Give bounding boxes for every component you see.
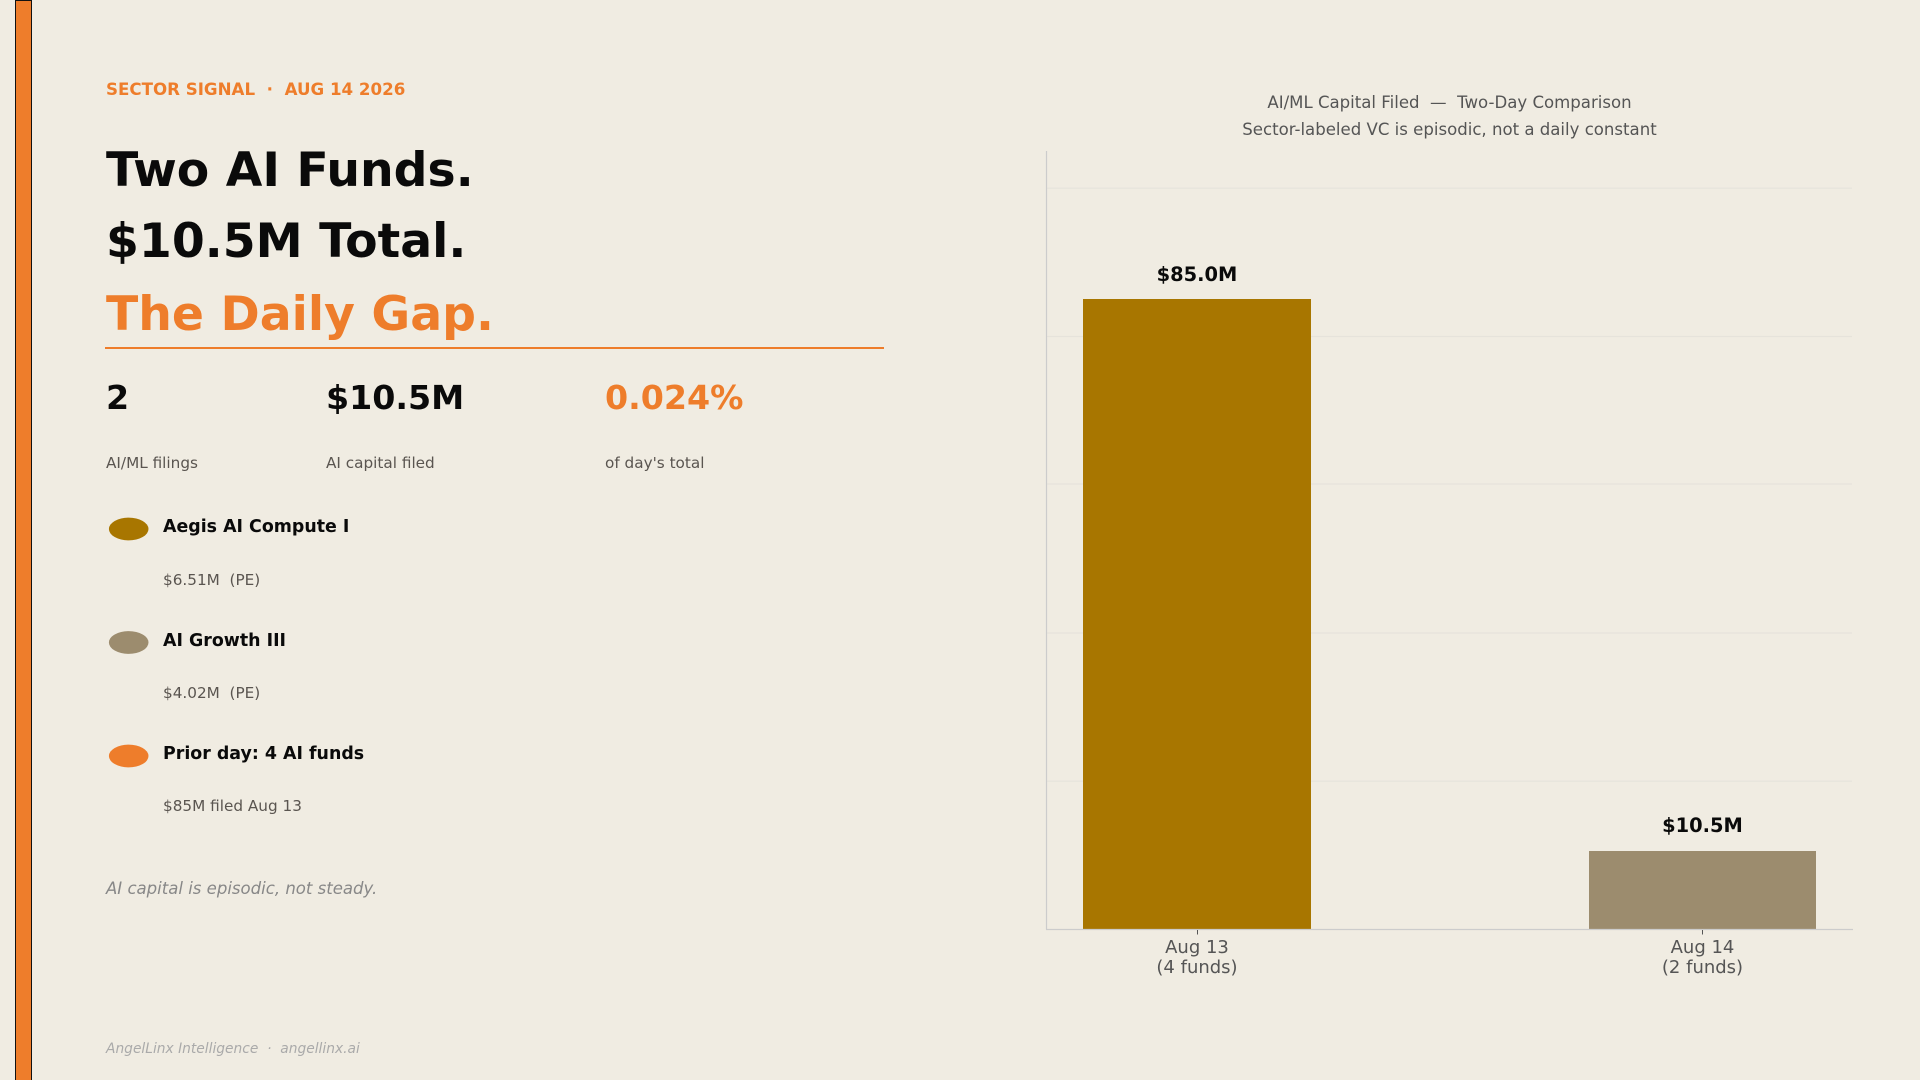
- title: The Daily Gap.: [106, 287, 494, 342]
- axis label: Aug 14: [1662, 937, 1743, 978]
- axis label: Aug 14: Aug 14: [1671, 937, 1734, 958]
- stat: filings: 2: [106, 378, 129, 417]
- stat: capital: AI capital filed: [326, 454, 435, 472]
- legend item: AI Growth III: AI Growth III: [163, 631, 286, 651]
- value label: Aug 13: $85.0M: [1157, 263, 1237, 286]
- footer source: AngelLinx Intelligence · angellinx.ai: [105, 1041, 360, 1057]
- stat: capital: [326, 378, 464, 472]
- title rule: [105, 347, 884, 349]
- legend item: prior day: [109, 744, 364, 815]
- accent bar: [16, 0, 32, 1080]
- legend item: AI Growth III: $4.02M (PE): [163, 684, 260, 702]
- legend item: AI Growth III: [109, 631, 286, 702]
- axis label: Aug 13: Aug 13: [1165, 937, 1229, 958]
- panel: left summary: [105, 80, 884, 1057]
- axis label: Aug 14: (2 funds): [1662, 957, 1743, 978]
- takeaway note: AI capital is episodic, not steady.: [105, 879, 377, 898]
- bar: Aug 13: [1083, 299, 1311, 929]
- stat: filings: AI/ML filings: [106, 454, 198, 472]
- bar: Aug 14: [1589, 851, 1816, 929]
- stat: share: 0.024%: [605, 378, 744, 417]
- stat: filings: [106, 378, 198, 472]
- legend item: prior day: $85M filed Aug 13: [163, 797, 302, 815]
- chart title: AI/ML Capital Filed — Two-Day Comparison: [1267, 93, 1632, 112]
- legend item: Aegis AI Compute I: [109, 517, 349, 589]
- stat: capital: $10.5M: [326, 378, 464, 417]
- title: $10.5M Total.: [106, 214, 466, 269]
- kicker: SECTOR SIGNAL · AUG 14 2026: [106, 80, 405, 99]
- axis label: Aug 13: [1156, 937, 1238, 978]
- chart title: Sector-labeled VC is episodic, not a daily constant: [1242, 120, 1657, 139]
- legend item: prior day: Prior day: 4 AI funds: [163, 744, 364, 764]
- chart axes: [1046, 151, 1853, 930]
- title: Two AI Funds.: [106, 143, 474, 198]
- axis label: Aug 13: (4 funds): [1156, 957, 1238, 978]
- chart title: [1242, 93, 1657, 139]
- stat: share: [605, 378, 744, 472]
- legend item: Aegis AI Compute I: $6.51M (PE): [163, 571, 260, 589]
- legend item: Aegis AI Compute I: Aegis AI Compute I: [163, 517, 349, 537]
- value label: Aug 14: $10.5M: [1662, 814, 1743, 837]
- stat: share: of day's total: [605, 454, 704, 472]
- title: [106, 143, 494, 342]
- panel: bar chart: [1046, 93, 1853, 978]
